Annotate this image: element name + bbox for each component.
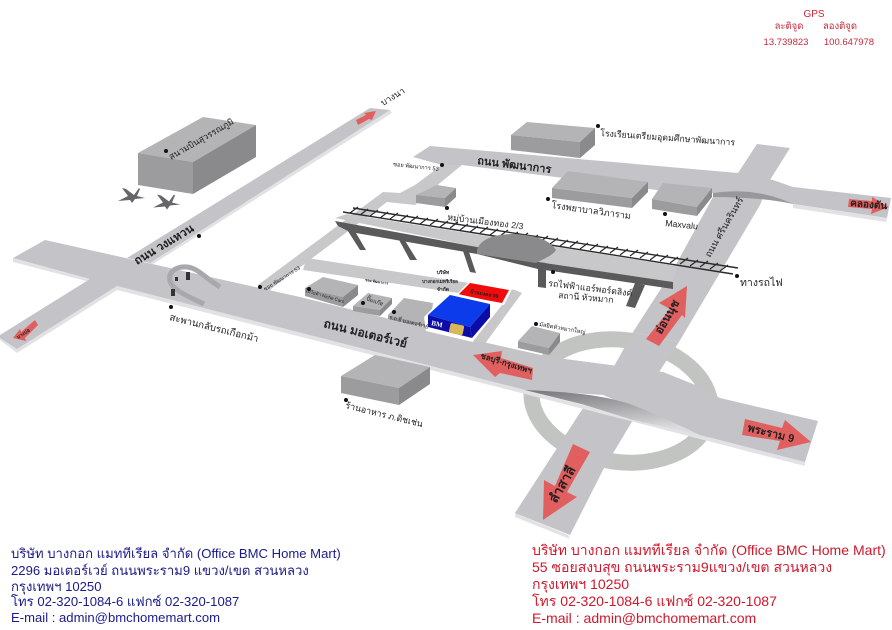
- map labels: โตโยต้า Niche Cars: [305, 287, 346, 304]
- road: soi Phatthanakan 53 and rear lane: [258, 165, 522, 345]
- building: airport: [138, 117, 256, 194]
- map labels: จำกัด: [437, 286, 449, 293]
- roundabout ring: [523, 328, 719, 474]
- building: restaurant: [341, 355, 430, 405]
- building: motorway shop: [388, 298, 433, 328]
- dots: [164, 124, 739, 402]
- map labels: ชลบุรี-กรุงเทพฯ: [479, 350, 534, 377]
- map labels: ซอย พัฒนาการ: [365, 277, 389, 286]
- U-turn bridge: [170, 267, 220, 304]
- GPS coordinates: ลองติจูด: [823, 21, 857, 32]
- BMC blue building: [424, 292, 494, 342]
- map labels: ลำสาลี: [546, 463, 579, 506]
- GPS coordinates: ละติจูด: [775, 21, 803, 32]
- address: Office BMC Home Mart (red): กรุงเทพฯ 10250: [532, 576, 629, 593]
- map labels: มัสยิดหัวหมากใหญ่: [539, 321, 586, 336]
- map labels: บางนา: [379, 86, 407, 108]
- map labels: บริษัท: [437, 269, 450, 276]
- map labels: ทางรถไฟ: [740, 276, 783, 289]
- map labels: คลองตัน: [850, 197, 888, 212]
- map labels: โรงพยาบาลวิภาราม: [551, 199, 632, 221]
- building: hospital: [552, 171, 648, 208]
- interchange upper road: [612, 332, 679, 378]
- map labels: ร.ถ.ยี่ มอเตอร์เวย์: [389, 313, 429, 331]
- address: Office BMC Home Mart (red): E-mail : admin@bmchomemart.com: [532, 610, 756, 626]
- map labels: พระราม 9: [746, 422, 795, 445]
- neighbouring red building: บ้านมงคล 98: [470, 288, 499, 300]
- address: Office BMC Home Mart (blue): E-mail : admin@bmchomemart.com: [11, 610, 220, 625]
- building: Niche Cars: [305, 277, 358, 307]
- building: small mall: [518, 326, 560, 355]
- map labels: บางกอกเมทรีเรียล: [422, 278, 458, 284]
- road overpass shadow: Khlong Tan: [713, 191, 793, 204]
- map labels: รถไฟฟ้าแอร์พอร์ตลิงค์: [548, 278, 633, 298]
- address: Office BMC Home Mart (red): 55 ซอยสงบสุข ถนนพระราม9แขวง/เขต สวนหลวง: [532, 559, 832, 576]
- road: Phatthanakan shadow edge: [793, 204, 887, 222]
- building: school: [511, 122, 595, 158]
- map labels: ถนน พัฒนาการ: [477, 154, 552, 176]
- neighbouring red building: [456, 281, 512, 305]
- GPS coordinates: 13.739823: [764, 37, 808, 48]
- map labels: Maxvalu: [665, 218, 699, 231]
- map labels: ปั๊มแก๊ส: [365, 294, 385, 308]
- address: Office BMC Home Mart (blue): 2296 มอเตอร์เวย์ ถนนพระราม9 แขวง/เขต สวนหลวง: [11, 563, 309, 578]
- road: Wongwaen: [127, 108, 392, 266]
- building: gas station: [353, 293, 392, 316]
- building: village: [416, 185, 456, 207]
- map labels: ถนน มอเตอร์เวย์: [322, 316, 409, 351]
- address: Office BMC Home Mart (blue): บริษัท บางกอก แมททีเรียล จำกัด (Office BMC Home Mart): [11, 546, 341, 561]
- map labels: ร้านอาหาร ภ.ดิชเช่น: [345, 400, 424, 429]
- map labels: [15, 86, 888, 506]
- address: Office BMC Home Mart (red): บริษัท บางกอก แมททีเรียล จำกัด (Office BMC Home Mart): [532, 542, 886, 558]
- map labels: ซอย พัฒนาการ 53: [393, 161, 439, 173]
- address: Office BMC Home Mart (blue): โทร 02-320-1084-6 แฟกซ์ 02-320-1087: [11, 594, 239, 609]
- arrows: [13, 111, 889, 520]
- address: Office BMC Home Mart (red): โทร 02-320-1084-6 แฟกซ์ 02-320-1087: [532, 593, 777, 609]
- railway track: [343, 207, 738, 274]
- overpass shadow: [525, 390, 700, 435]
- station roof: [477, 234, 556, 263]
- address: Office BMC Home Mart (blue): [11, 546, 341, 625]
- map labels: หมู่บ้านเมืองทอง 2/3: [447, 212, 524, 232]
- BMC blue building: BM: [431, 319, 444, 329]
- map labels: ซอย พัฒนาการ 53: [262, 265, 302, 293]
- road: Lam Sali: [515, 405, 633, 539]
- map labels: สนามบินสุวรรณภูมิ: [167, 116, 236, 163]
- GPS coordinates: GPS: [803, 9, 825, 20]
- address: Office BMC Home Mart (red): [532, 542, 886, 626]
- building: Maxvalu: [652, 183, 712, 216]
- GPS coordinates: 100.647978: [824, 37, 874, 48]
- road: Motorway: [0, 240, 818, 466]
- map labels: บางบ่อ: [15, 327, 31, 341]
- road: Phatthanakan: [413, 146, 891, 218]
- map labels: โรงเรียนเตรียมอุดมศึกษาพัฒนาการ: [600, 128, 736, 148]
- address: Office BMC Home Mart (blue): กรุงเทพฯ 10250: [11, 579, 102, 595]
- rail platform: [335, 214, 677, 308]
- map labels: สะพานกลับรถเกือกม้า: [168, 311, 260, 345]
- road: Srinakarin north: [633, 144, 790, 342]
- map labels: สถานี หัวหมาก: [558, 290, 614, 305]
- map labels: ถนน ศรีนครินทร์: [702, 195, 745, 259]
- map labels: ถนน วงแหวน: [132, 223, 196, 268]
- map labels: อ่อนนุช: [652, 297, 683, 337]
- GPS coordinates: [764, 9, 874, 48]
- icon: airplanes: [118, 188, 180, 210]
